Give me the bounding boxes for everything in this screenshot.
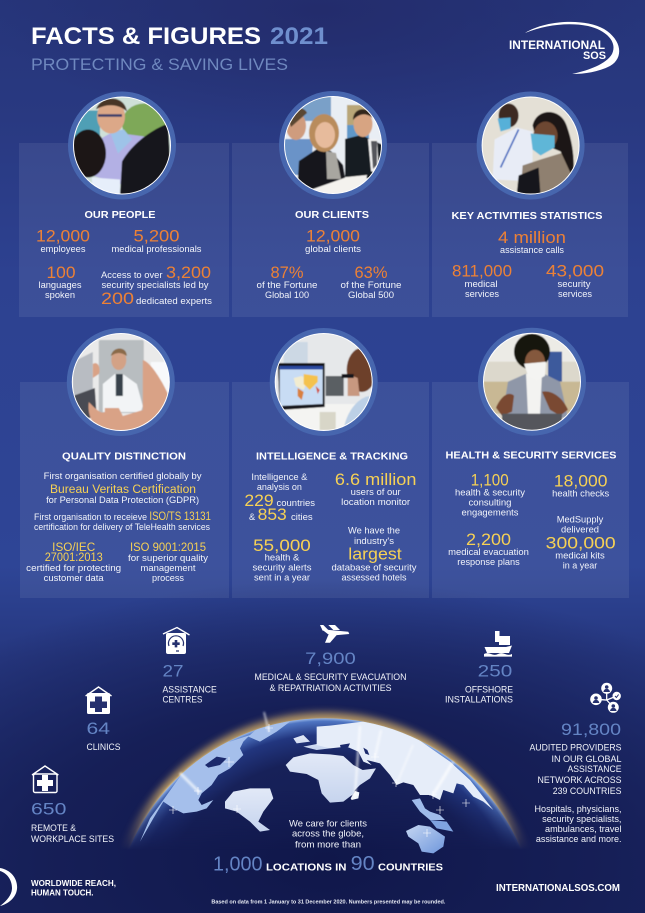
stat: security services: services: [558, 289, 592, 299]
text: provider types: assistance and more.: [536, 834, 622, 844]
stat: audited providers: 91,800: [561, 720, 621, 739]
stat: medical evacuation plans: 2,200: [466, 531, 511, 549]
icon: assistance centre: [163, 628, 190, 654]
stat: audited providers: [530, 720, 622, 796]
text: telehealth certification: [34, 511, 211, 532]
stat: hotels database: industry's: [354, 536, 394, 546]
land: the Americas: [140, 720, 330, 842]
stat: security alerts: health &: [265, 552, 300, 562]
icon: aeroplane: [320, 625, 349, 643]
text: provider types: [534, 804, 622, 844]
stat: employees: 12,000: [36, 228, 90, 246]
stat: security specialists: 3,200: [166, 264, 211, 282]
text: GDPR certification: First organisation certified globally by: [44, 471, 202, 481]
stat: global clients: [305, 228, 361, 254]
tagline: WORLDWIDE REACH,: [31, 878, 116, 888]
panel: intelligence and tracking: [232, 328, 429, 598]
stat: consulting engagements: 1,100: [471, 472, 509, 490]
land: Eurasia and Oceania: [317, 722, 493, 853]
stat: security specialists: dedicated experts: [136, 296, 212, 306]
stat: offshore installations: [445, 662, 513, 705]
text: telehealth certification: ISO/TS 13131: [149, 511, 211, 523]
stat: countries and cities: Intelligence &: [251, 472, 308, 482]
stat: security alerts: security alerts: [252, 562, 312, 572]
stat: security alerts: [252, 537, 312, 582]
text: provider types: Hospitals, physicians,: [534, 804, 622, 814]
icon: workplace site: [32, 766, 58, 792]
photo: our people: [68, 92, 176, 200]
photo: our clients: [279, 91, 387, 199]
stat: medical evacuation plans: medical evacuation: [448, 547, 529, 557]
stat: hotels database: [332, 526, 417, 582]
heading: quality distinction: QUALITY DISTINCTION: [62, 452, 186, 462]
text: ISO 9001: for superior quality: [128, 553, 208, 563]
stat: hotels database: We have the: [348, 526, 400, 536]
title: 2021: [270, 23, 328, 50]
stat: countries and cities: 229: [244, 492, 274, 510]
stat: offshore installations: 250: [478, 662, 512, 681]
stat: security services: 43,000: [546, 262, 604, 280]
text: telehealth certification: First organisation to receieve: [34, 512, 147, 522]
photo: health and security services: [478, 328, 586, 436]
stat: evacuation activities: & REPATRIATION ACTIVITIES: [270, 683, 392, 693]
heading: health and security services: HEALTH & SECURITY SERVICES: [446, 451, 617, 462]
text: provider types: ambulances, travel: [545, 824, 622, 834]
stat: location monitor users: [335, 471, 416, 507]
stat: health checks: 18,000: [554, 473, 607, 491]
stat: audited providers: ASSISTANCE: [568, 764, 622, 774]
stat: security alerts: 55,000: [253, 537, 311, 555]
text: ISO 27001: 27001:2013: [45, 552, 103, 564]
stat: fortune global 500: of the Fortune: [340, 280, 402, 290]
photo: quality distinction: [67, 328, 175, 436]
text: provider types: security specialists,: [542, 814, 622, 824]
stat: health checks: health checks: [552, 489, 610, 499]
stat: remote and workplace sites: REMOTE &: [31, 823, 77, 833]
panel: key activities statistics: [432, 92, 628, 317]
stat: security specialists: Access to over: [101, 270, 162, 280]
stat: medical professionals: 5,200: [134, 228, 180, 246]
stat: medical professionals: [112, 228, 202, 254]
stat: medical services: services: [465, 289, 499, 299]
stat: locations and countries: COUNTRIES: [378, 862, 443, 874]
text: we care for clients: from more than: [295, 840, 361, 850]
stat: offshore installations: OFFSHORE: [465, 685, 513, 695]
stat: countries and cities: &: [249, 512, 256, 522]
tagline: HUMAN TOUCH.: [31, 888, 94, 898]
stat: location monitor users: 6.6 million: [335, 471, 416, 489]
text: we care for clients: We care for clients: [289, 819, 367, 829]
stat: hotels database: database of security: [332, 562, 417, 572]
text: we care for clients: [289, 819, 367, 850]
stat: evacuation activities: MEDICAL & SECURITY EVACUATION: [254, 672, 406, 682]
stat: locations and countries: LOCATIONS IN: [266, 862, 346, 874]
heading: intelligence and tracking: INTELLIGENCE & TRACKING: [256, 452, 408, 462]
photo: intelligence and tracking: [270, 328, 378, 436]
icon: offshore rig: [484, 631, 512, 657]
stat: audited providers: AUDITED PROVIDERS: [530, 743, 622, 753]
stat: offshore installations: INSTALLATIONS: [445, 695, 513, 705]
panel: our clients: [232, 91, 429, 317]
stat: medical services: medical: [464, 279, 498, 289]
heading: our clients: OUR CLIENTS: [295, 210, 369, 221]
stat: security services: security: [558, 279, 591, 289]
stat: countries and cities: analysis on: [257, 482, 302, 492]
stat: location monitor users: users of our: [351, 487, 401, 497]
stat: consulting engagements: health & security: [455, 488, 525, 498]
text: ISO 27001: [26, 542, 121, 583]
stat: fortune global 100: of the Fortune: [256, 280, 318, 290]
stat: security specialists: security specialists led by: [102, 280, 209, 290]
stat: audited providers: 239 COUNTRIES: [553, 786, 622, 796]
stat: locations and countries: [213, 853, 443, 876]
photo: key activities: [477, 92, 585, 200]
stat: medical professionals: medical professionals: [112, 244, 202, 254]
stat: security specialists: [101, 264, 212, 308]
logo: International SOS: SOS: [583, 50, 606, 62]
stat: assistance centres: [162, 662, 217, 705]
stat: assistance calls: 4 million: [498, 229, 566, 247]
website: INTERNATIONALSOS.COM: [496, 882, 620, 894]
stat: global clients: global clients: [305, 244, 361, 254]
icon: clinic: [86, 687, 112, 714]
stat: audited providers: NETWORK ACROSS: [538, 775, 622, 785]
stat: evacuation activities: 7,900: [305, 649, 356, 668]
stat: clinics: CLINICS: [86, 742, 120, 752]
text: ISO 9001: [128, 542, 208, 583]
stat: assistance calls: assistance calls: [500, 245, 564, 255]
heading: our people: OUR PEOPLE: [84, 210, 156, 221]
stat: medical services: 811,000: [452, 262, 512, 280]
stat: security specialists: 200: [101, 290, 134, 308]
stat: hotels database: assessed hotels: [342, 572, 407, 582]
stat: evacuation activities: [254, 649, 406, 693]
panel: health and security services: [432, 328, 629, 598]
stat: fortune global 100: [256, 264, 318, 300]
stat: medical services: [452, 262, 512, 299]
logo: International SOS: [509, 22, 619, 74]
stat: medical kits: in a year: [563, 561, 597, 571]
text: ISO 9001: ISO 9001:2015: [130, 542, 206, 554]
stat: languages: languages: [38, 280, 82, 290]
stat: security alerts: sent in a year: [254, 572, 310, 582]
stat: clinics: [86, 719, 120, 752]
text: telehealth certification: certification for delivery of TeleHealth services: [34, 522, 210, 532]
stat: medical evacuation plans: response plans: [457, 557, 520, 567]
text: ISO 27001: certified for protecting: [26, 563, 121, 573]
stat: employees: employees: [40, 244, 86, 254]
stat: consulting engagements: engagements: [462, 508, 519, 518]
text: we care for clients: across the globe,: [292, 829, 364, 839]
subtitle: PROTECTING & SAVING LIVES: [31, 55, 288, 74]
stat: medical evacuation plans: [448, 531, 529, 567]
stat: assistance centres: ASSISTANCE: [162, 685, 217, 695]
title: FACTS & FIGURES: [31, 23, 261, 50]
stat: remote and workplace sites: [31, 800, 114, 844]
stat: fortune global 500: 63%: [354, 264, 388, 282]
text: GDPR certification: for Personal Data Protection (GDPR): [46, 495, 199, 505]
tagline: [31, 878, 116, 898]
light beams: [180, 712, 453, 795]
stat: remote and workplace sites: 650: [31, 800, 66, 819]
stat: fortune global 500: [340, 264, 402, 300]
panel: our people: [19, 92, 229, 317]
stat: countries and cities: [244, 472, 315, 524]
stat: global clients: 12,000: [306, 228, 360, 246]
stat: medical kits: delivered: [561, 525, 599, 535]
stat: medical kits: medical kits: [555, 551, 605, 561]
stat: countries and cities: cities: [291, 512, 313, 522]
land: Africa: [286, 753, 376, 803]
stat: hotels database: largest: [348, 546, 402, 564]
logo: International SOS: INTERNATIONAL: [509, 40, 605, 52]
stat: languages: spoken: [45, 290, 75, 300]
stat: fortune global 100: Global 100: [265, 290, 309, 300]
stat: locations and countries: 90: [351, 853, 375, 875]
stat: clinics: 64: [86, 719, 110, 738]
stat: assistance centres: 27: [162, 662, 184, 681]
stat: consulting engagements: consulting: [468, 498, 512, 508]
text: GDPR certification: Bureau Veritas Certification: [50, 484, 196, 496]
stat: languages: [38, 264, 82, 300]
stat: languages: 100: [46, 264, 76, 282]
stat: countries and cities: 853: [258, 506, 287, 524]
icon: provider network: [590, 683, 621, 713]
footnote: Based on data from 1 January to 31 December 2020. Numbers presented may be rounded.: [211, 900, 446, 906]
stat: countries and cities: countries: [276, 498, 315, 508]
stat: medical kits: MedSupply: [557, 515, 604, 525]
stat: audited providers: IN OUR GLOBAL: [552, 754, 622, 764]
globe: [125, 707, 525, 854]
text: ISO 9001: process: [152, 573, 184, 583]
stat: health checks: [552, 473, 610, 499]
text: ISO 27001: ISO/IEC: [52, 542, 95, 554]
logo mark: swoosh: [0, 868, 17, 906]
text: ISO 27001: customer data: [44, 573, 105, 583]
light sparks: [169, 724, 470, 837]
stat: employees: [36, 228, 90, 254]
stat: medical kits: [546, 515, 616, 571]
stat: assistance centres: CENTRES: [162, 695, 202, 705]
heading: key activities statistics: KEY ACTIVITIES STATISTICS: [452, 211, 603, 222]
stat: locations and countries: 1,000: [213, 854, 262, 876]
stat: assistance calls: [498, 229, 566, 255]
panel: quality distinction: [20, 328, 229, 598]
stat: location monitor users: location monitor: [341, 497, 410, 507]
stat: medical kits: 300,000: [546, 535, 616, 553]
stat: consulting engagements: [455, 472, 525, 518]
text: GDPR certification: [44, 471, 202, 505]
stat: security services: [546, 262, 604, 299]
text: ISO 9001: management: [140, 563, 196, 573]
stat: fortune global 100: 87%: [270, 264, 304, 282]
stat: remote and workplace sites: WORKPLACE SITES: [31, 834, 114, 844]
stat: fortune global 500: Global 500: [348, 290, 394, 300]
